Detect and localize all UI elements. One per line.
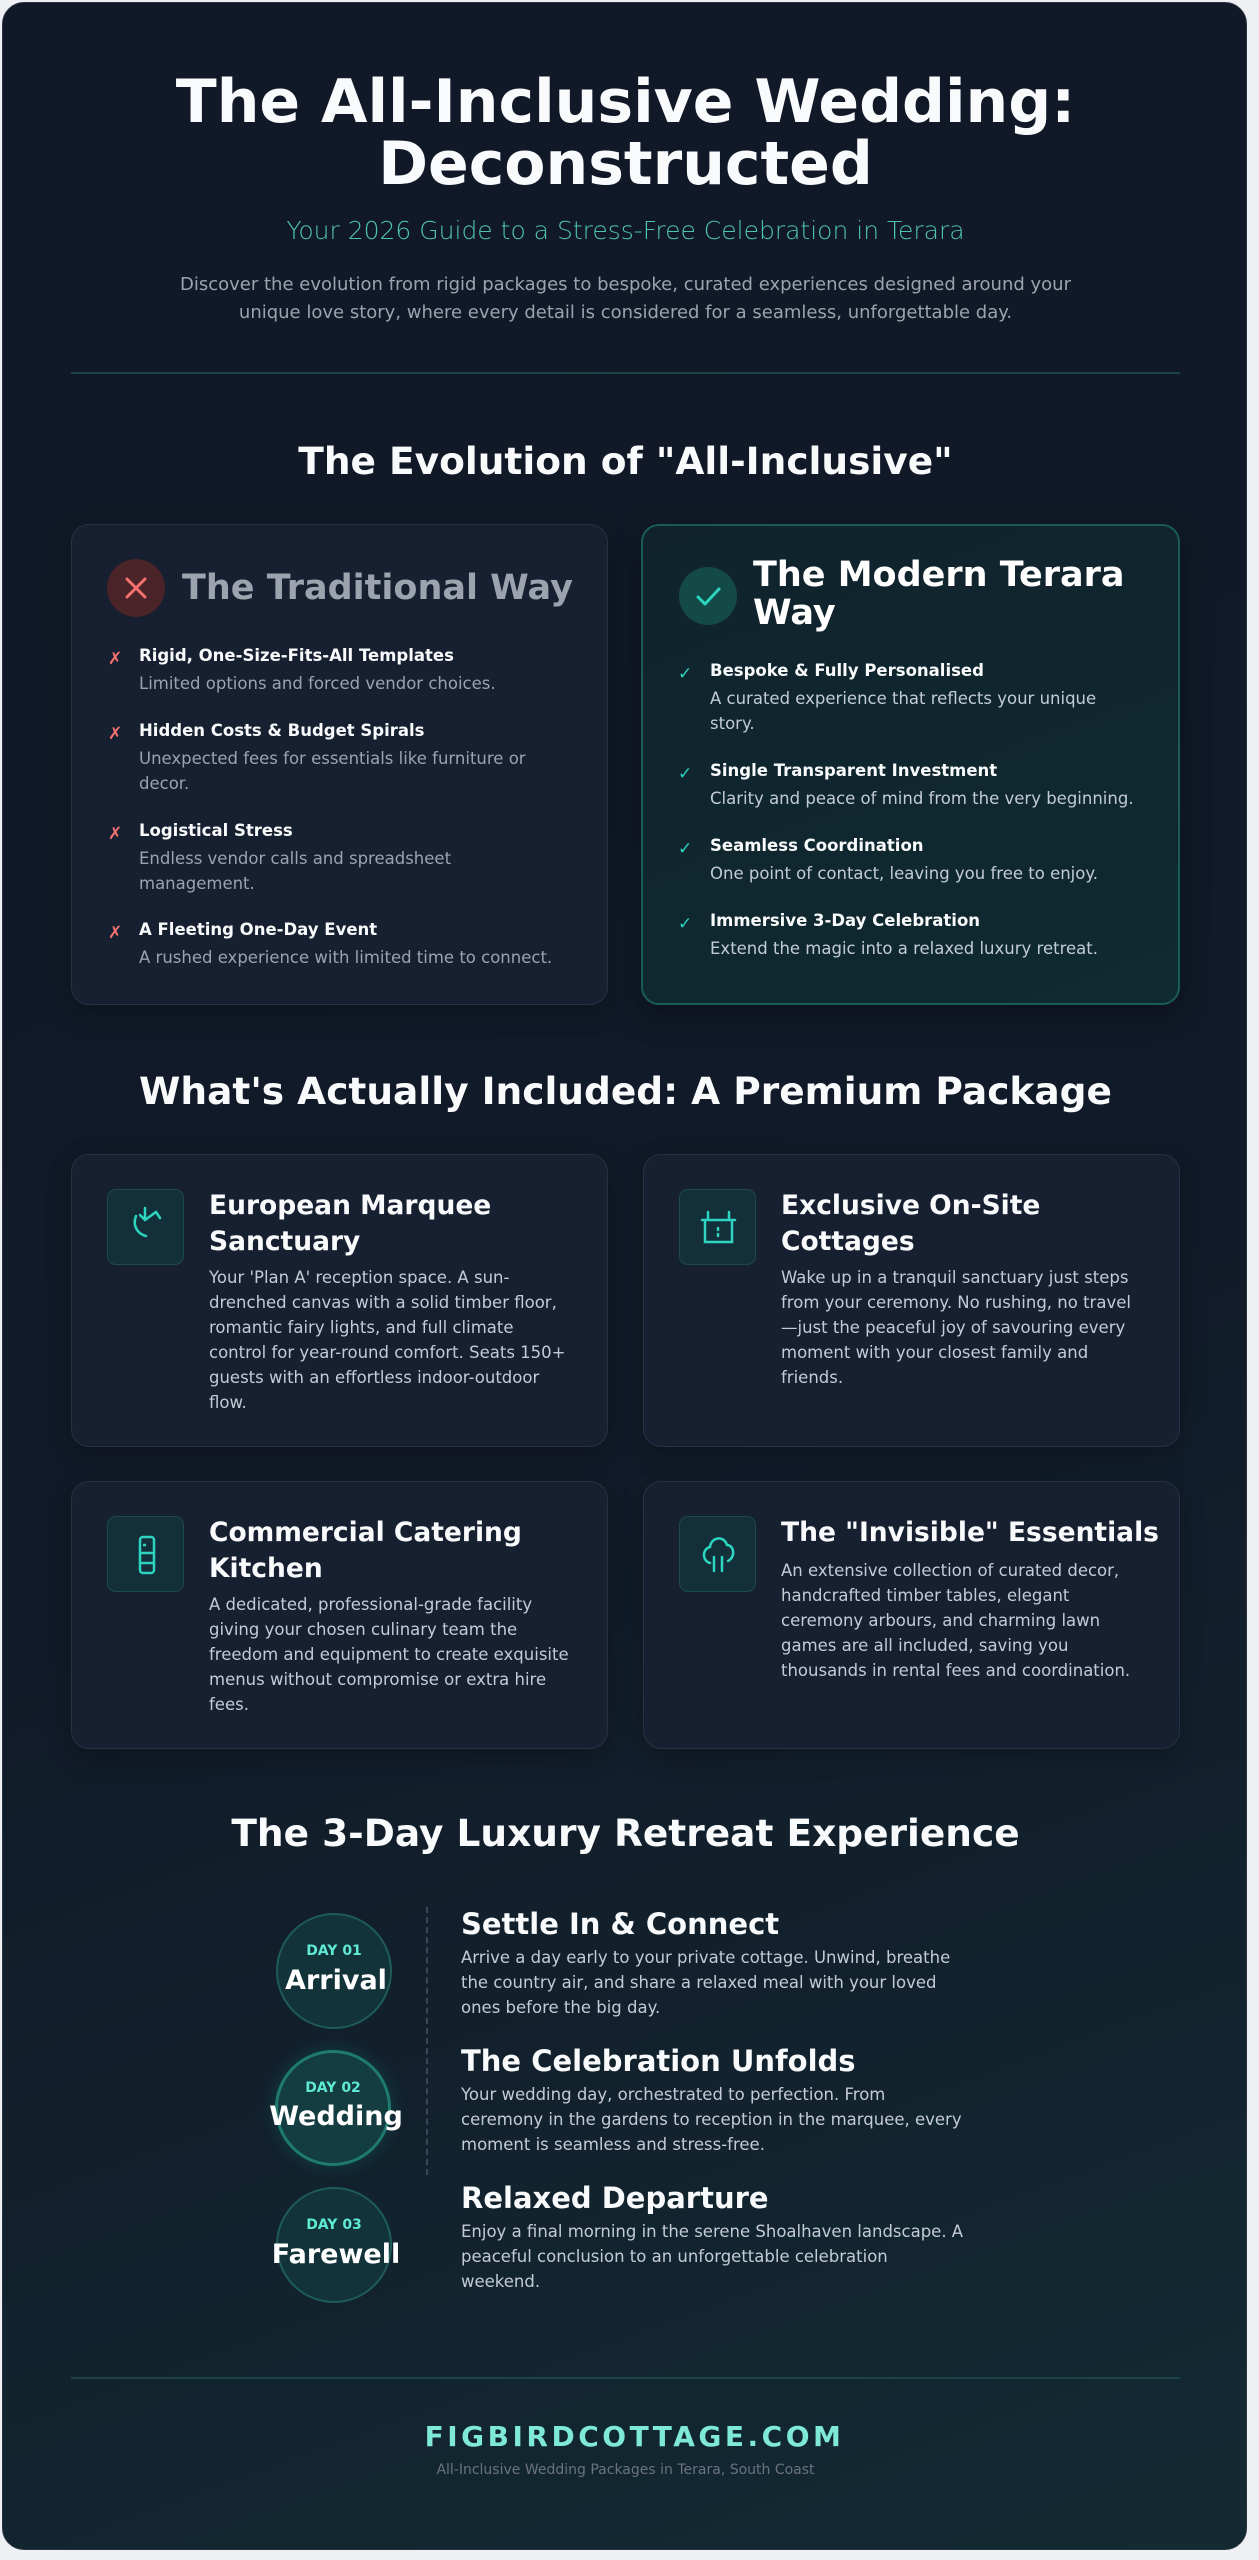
heading: The Modern Terara Way xyxy=(753,555,1124,633)
panel: traditional way: Endless vendor calls and spreadsheet management. xyxy=(139,849,451,892)
card: kitchen xyxy=(71,1481,608,1749)
panel: traditional way: ✗ xyxy=(108,649,122,669)
title: Commercial Catering Kitchen xyxy=(209,1517,522,1584)
panel: modern terara way: Bespoke & Fully Personalised xyxy=(710,661,984,680)
icon: cottage xyxy=(679,1189,756,1265)
item 1 xyxy=(108,646,496,693)
item 4 xyxy=(108,920,552,967)
circle: farewell: Farewell xyxy=(272,2239,400,2270)
panel: traditional way: A Fleeting One-Day Event xyxy=(139,920,377,939)
text: A dedicated, professional-grade facility giving your chosen culinary team the freedom and equipment to create exquisite menus without compromise or extra hire fees. xyxy=(209,1595,569,1714)
panel: modern terara way: Clarity and peace of mind from the very beginning. xyxy=(710,789,1134,808)
panel: modern terara way: ✓ xyxy=(678,764,692,784)
icon: kitchen xyxy=(107,1516,184,1592)
footer: All-Inclusive Wedding Packages in Terara, South Coast xyxy=(436,2462,815,2478)
panel: modern terara way: Single Transparent Investment xyxy=(710,761,997,780)
panel: traditional way: Unexpected fees for essentials like furniture or decor. xyxy=(139,749,526,792)
circle: arrival: Arrival xyxy=(285,1965,387,1996)
title: The "Invisible" Essentials xyxy=(781,1517,1159,1548)
text: The Celebration Unfolds xyxy=(461,2044,856,2078)
panel: modern terara way: One point of contact, leaving you free to enjoy. xyxy=(710,864,1098,883)
card: marquee xyxy=(71,1154,608,1447)
day 2: Your wedding day, orchestrated to perfection. From ceremony in the gardens to reception in the marquee, every moment is seamless and stress-free. xyxy=(461,2085,962,2154)
intro text: Discover the evolution from rigid packages to bespoke, curated experiences designed around your unique love story, where every detail is considered for a seamless, unforgettable day. xyxy=(180,274,1071,323)
heading: retreat: The 3-Day Luxury Retreat Experience xyxy=(231,1811,1020,1855)
panel: traditional way: Hidden Costs & Budget Spirals xyxy=(139,721,424,740)
panel: modern terara way: ✓ xyxy=(678,664,692,684)
footer: FIGBIRDCOTTAGE.COM xyxy=(425,2420,844,2453)
text: Settle In & Connect xyxy=(461,1907,779,1941)
title: Exclusive On-Site Cottages xyxy=(781,1190,1040,1257)
panel: traditional way: Rigid, One-Size-Fits-All Templates xyxy=(139,646,454,665)
circle: farewell: DAY 03 xyxy=(306,2217,362,2233)
card: cottages xyxy=(643,1154,1180,1447)
text: Your 'Plan A' reception space. A sun-drenched canvas with a solid timber floor, romantic fairy lights, and full climate control for year-round comfort. Seats 150+ guests with an effortless indoor-outdoor flow. xyxy=(209,1268,565,1412)
circle: wedding: Wedding xyxy=(269,2101,403,2132)
day 3: Enjoy a final morning in the serene Shoalhaven landscape. A peaceful conclusion to an unforgettable celebration weekend. xyxy=(461,2222,963,2291)
panel: modern terara way: ✓ xyxy=(678,914,692,934)
panel: modern terara way: ✓ xyxy=(678,839,692,859)
circle: wedding xyxy=(275,2050,391,2166)
circle: farewell xyxy=(276,2187,392,2303)
item 3 xyxy=(678,836,1098,883)
day 2 xyxy=(269,2044,962,2170)
item 4 xyxy=(678,911,1098,958)
icon: cloud xyxy=(679,1516,756,1592)
card: essentials xyxy=(643,1481,1180,1749)
title xyxy=(176,67,1075,199)
heading: included: What's Actually Included: A Premium Package xyxy=(139,1069,1112,1113)
subtitle: Your 2026 Guide to a Stress-Free Celebration in Terara xyxy=(286,216,965,245)
circle: arrival xyxy=(276,1913,392,2029)
panel: modern terara way: Extend the magic into a relaxed luxury retreat. xyxy=(710,939,1098,958)
day 3 xyxy=(272,2181,963,2303)
panel: traditional way: Limited options and forced vendor choices. xyxy=(139,674,496,693)
panel: traditional way: ✗ xyxy=(108,923,122,943)
circle: wedding: DAY 02 xyxy=(305,2080,361,2096)
panel: modern terara way: Seamless Coordination xyxy=(710,836,924,855)
item 1 xyxy=(678,661,1096,732)
item 3 xyxy=(108,821,451,892)
text: An extensive collection of curated decor, handcrafted timber tables, elegant ceremony arbours, and charming lawn games are all included, saving you thousands in rental fees and coordination. xyxy=(781,1561,1130,1680)
panel: modern terara way: Immersive 3-Day Celebration xyxy=(710,911,980,930)
panel: traditional way: ✗ xyxy=(108,824,122,844)
circle: arrival: DAY 01 xyxy=(306,1943,362,1959)
item 2 xyxy=(678,761,1134,808)
icon: check xyxy=(679,567,737,625)
panel: traditional way: A rushed experience with limited time to connect. xyxy=(139,948,552,967)
title: Deconstructed xyxy=(378,129,873,199)
title: The All-Inclusive Wedding: xyxy=(176,67,1075,137)
text: Wake up in a tranquil sanctuary just steps from your ceremony. No rushing, no travel—just the peaceful joy of savouring every moment with your closest family and friends. xyxy=(781,1268,1131,1387)
panel: modern terara way xyxy=(641,524,1180,1005)
day 1 xyxy=(276,1907,950,2029)
panel: traditional way: ✗ xyxy=(108,724,122,744)
day 1: Arrive a day early to your private cottage. Unwind, breathe the country air, and share a relaxed meal with your loved ones before the big day. xyxy=(461,1948,950,2017)
text: Relaxed Departure xyxy=(461,2181,769,2215)
footer xyxy=(425,2420,844,2478)
heading: evolution: The Evolution of "All-Inclusive" xyxy=(298,439,953,483)
icon: red x xyxy=(107,559,165,617)
heading: The Traditional Way xyxy=(182,568,573,608)
icon: marquee xyxy=(107,1189,184,1265)
panel: modern terara way: A curated experience that reflects your unique story. xyxy=(710,689,1096,732)
item 2 xyxy=(108,721,526,792)
title: European Marquee Sanctuary xyxy=(209,1190,491,1257)
panel: traditional way: Logistical Stress xyxy=(139,821,293,840)
panel: traditional way xyxy=(71,524,608,1005)
